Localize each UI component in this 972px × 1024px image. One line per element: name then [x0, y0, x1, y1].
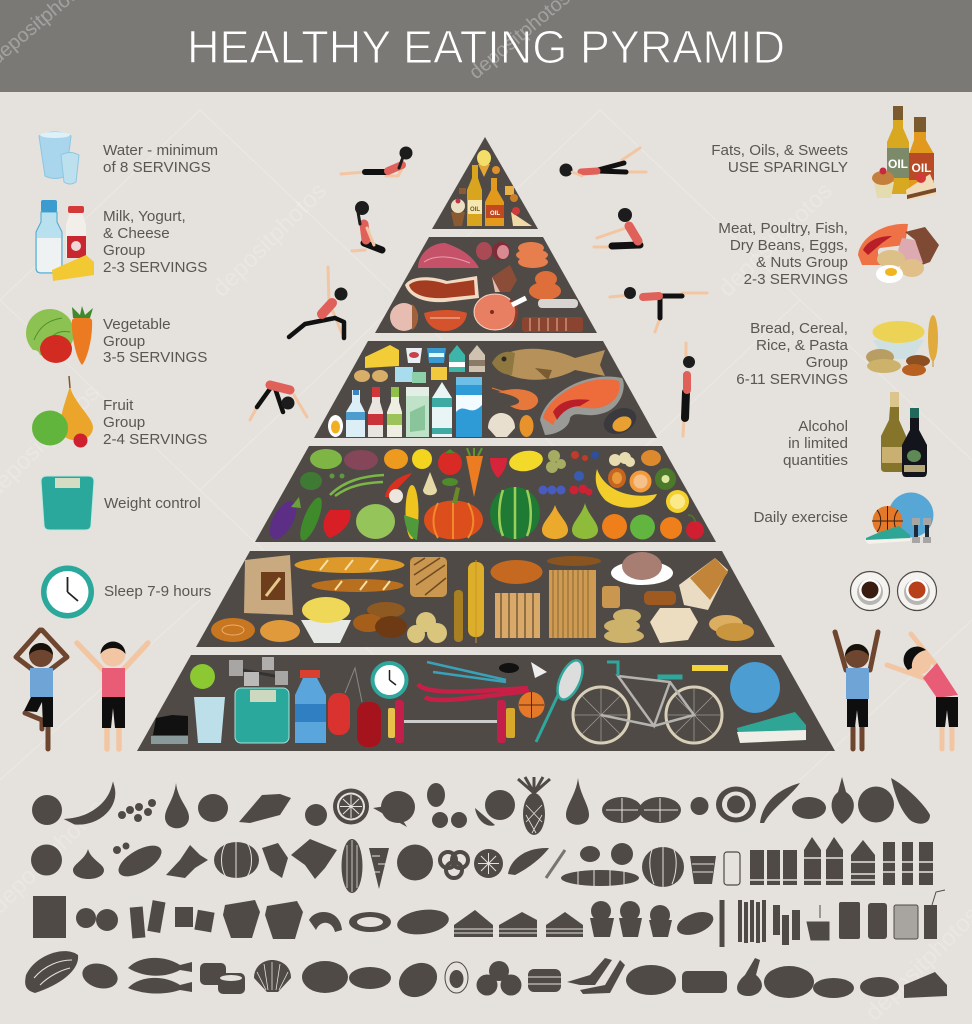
oil bottle yellow: OIL: [470, 207, 480, 213]
banana: [596, 469, 657, 508]
tier 3: dairy and fish: [328, 345, 640, 439]
sausage slices: [476, 242, 510, 260]
icon: bread and cereal: [866, 315, 938, 376]
tier 4: vegetables and fruit: [264, 448, 704, 543]
row 4: seafood and meat silhouettes: [25, 951, 947, 1004]
label: fruit: Fruit: [103, 397, 134, 414]
blueberries: [538, 486, 566, 494]
eggs: [354, 370, 388, 382]
label: alcohol: in limited: [788, 435, 848, 452]
nuts: [609, 452, 635, 467]
icon: vegetables: [26, 306, 93, 365]
baguettes: [294, 557, 404, 592]
blue milk carton: [456, 377, 482, 437]
small sweets: [459, 166, 518, 202]
left legend: [26, 132, 218, 618]
tier 2: meat: [390, 242, 583, 332]
pink ham: [390, 303, 418, 331]
cabbage: [356, 504, 395, 539]
strawberry: [490, 458, 507, 478]
woman side bend: [887, 634, 958, 749]
basketball: [518, 692, 544, 718]
herbs: [300, 472, 322, 490]
label: fruit: 2-4 SERVINGS: [103, 431, 207, 448]
water bottle: [295, 670, 326, 743]
title banner: [0, 0, 972, 92]
red bottle: [368, 387, 383, 437]
cobra pose: [341, 146, 412, 176]
red pepper: [324, 510, 351, 538]
yogurt pots: [406, 348, 446, 363]
exercise ball: [730, 662, 780, 713]
pumpkin: [424, 487, 483, 540]
tomato: [438, 449, 462, 475]
seated forward bend: [594, 208, 640, 247]
label: water: of 8 SERVINGS: [103, 159, 211, 176]
woman tree pose: [16, 630, 67, 749]
teal carton: [432, 382, 452, 437]
row 3: grain and sweets silhouettes: [33, 890, 945, 947]
small fusilli: [602, 586, 620, 608]
label: alcohol: quantities: [783, 452, 848, 469]
shrimp: [492, 388, 538, 410]
row 1: fruit and vegetable silhouettes: [32, 777, 930, 835]
icon: meat and eggs: [858, 224, 939, 283]
boxing gloves: [328, 668, 381, 747]
text: depositphotos: [713, 177, 838, 302]
small loaf: [547, 556, 601, 566]
peppers: [384, 449, 432, 469]
label: meat: Dry Beans, Eggs,: [730, 237, 848, 254]
icon: water glasses: [39, 132, 79, 184]
pyramid tiers: [137, 137, 835, 751]
warrior three pose: [610, 287, 707, 332]
tennis ball: [190, 664, 215, 689]
yoga figures: [250, 146, 707, 436]
label: exercise: Daily exercise: [753, 509, 848, 526]
dark breads: [353, 602, 407, 638]
label: vegetable: 3-5 SERVINGS: [103, 349, 207, 366]
white sausage: [538, 299, 578, 308]
oil bottle orange: OIL: [490, 211, 500, 217]
salmon pieces: [516, 242, 548, 268]
boiled egg: [328, 415, 343, 437]
lettuce: [310, 449, 342, 469]
icon: oils and sweets: OIL: [912, 161, 932, 175]
clock: [370, 661, 408, 699]
label: bread: Group: [806, 354, 848, 371]
label: meat: & Nuts Group: [756, 254, 848, 271]
tier 6: exercise: [151, 657, 806, 747]
label: sleep: Sleep 7-9 hours: [104, 583, 212, 600]
ice cream: [477, 150, 491, 177]
cucumber: [296, 495, 326, 543]
icon: oils and sweets: OIL: [888, 157, 908, 171]
kiwi: [655, 468, 676, 490]
garlic: [389, 489, 403, 503]
bread slice: [260, 620, 300, 642]
crackers: [709, 615, 754, 641]
pears: [542, 503, 598, 539]
purple leaves: [344, 450, 378, 470]
orange slice: [630, 470, 652, 492]
watermelon: [490, 487, 540, 539]
flour bag: [244, 555, 293, 615]
green carton: [406, 387, 429, 437]
icon: milk and cheese: [36, 200, 94, 281]
corn: [404, 485, 419, 540]
brown ham: [492, 265, 517, 292]
lemon: [508, 448, 544, 474]
racket: [536, 657, 588, 742]
woman dark skin arms up: [835, 632, 878, 749]
standing pose: [683, 343, 695, 436]
raw meat: [418, 243, 479, 268]
onion and leaf: [423, 472, 458, 495]
eggplant: [264, 497, 302, 543]
label: alcohol: Alcohol: [798, 418, 848, 435]
round steak: [424, 310, 467, 331]
mussel: [600, 403, 640, 439]
fusilli: [410, 557, 447, 597]
scale: [235, 688, 289, 743]
loaf: [679, 558, 728, 610]
bicycle: [573, 662, 722, 743]
label: water: Water - minimum: [103, 142, 218, 159]
ruler: [692, 665, 728, 671]
big exercising women: [16, 630, 958, 749]
potatoes: [407, 612, 447, 643]
ice and butter: [395, 367, 447, 383]
cherry: [686, 515, 704, 539]
label: meat: Meat, Poultry, Fish,: [718, 220, 848, 237]
apricot: [641, 450, 661, 466]
blue bottle: [346, 390, 365, 437]
label: fruit: Group: [103, 414, 145, 431]
icon: scale: [41, 476, 94, 530]
green bottle: [387, 387, 402, 437]
label: fats: Fats, Oils, & Sweets: [711, 142, 848, 159]
dumbbells: [229, 657, 288, 686]
icon: exercise gear: [865, 492, 934, 544]
carrot: [466, 448, 483, 497]
red currants: [570, 484, 592, 496]
icon: clock: [41, 566, 94, 618]
label: milk: Group: [103, 242, 145, 259]
label: vegetable: Group: [103, 333, 145, 350]
tier 5: grains: [211, 552, 754, 643]
label: vegetable: Vegetable: [103, 316, 171, 333]
cake slice: [511, 207, 532, 226]
bread slices: [650, 608, 698, 643]
icon: oils and sweets: [872, 106, 936, 200]
lunge pose: [289, 267, 348, 338]
gooseberries: [546, 450, 566, 473]
lemon slice: [666, 490, 689, 513]
orange meat: [529, 271, 561, 300]
spaghetti: [549, 570, 596, 638]
bread loaf: [490, 560, 542, 584]
barbell: [388, 700, 515, 743]
label: meat: 2-3 SERVINGS: [744, 271, 848, 288]
mashed bowl: [301, 597, 351, 643]
scallop: [488, 413, 515, 437]
oranges and apple: [602, 514, 682, 540]
row 2: vegetable and dairy silhouettes: [31, 837, 933, 893]
label: bread: Bread, Cereal,: [750, 320, 848, 337]
cupcake: [451, 198, 465, 226]
dark bread piece: [644, 591, 676, 605]
label: weight: Weight control: [104, 495, 201, 512]
fish: [492, 349, 605, 380]
label: bread: Rice, & Pasta: [756, 337, 849, 354]
label: milk: 2-3 SERVINGS: [103, 259, 207, 276]
label: milk: & Cheese: [103, 225, 170, 242]
big steak: [405, 276, 479, 302]
right legend: [711, 106, 939, 610]
small orange seafood: [520, 415, 534, 437]
plate with meat: [611, 552, 673, 585]
icon: coffee cups: [850, 572, 936, 610]
woman arms raised: [77, 642, 148, 749]
small cartons: [449, 345, 485, 372]
silhouette icon rows: [25, 777, 947, 1004]
text: depositphotos: [207, 177, 332, 302]
label: milk: Milk, Yogurt,: [103, 208, 186, 225]
icon: fruit: [32, 376, 93, 448]
label: fats: USE SPARINGLY: [728, 159, 848, 176]
sneaker: [737, 712, 806, 743]
icon: bottles: [881, 392, 927, 477]
ice skate: [151, 715, 188, 744]
cinnamon roll: [211, 618, 255, 642]
salmon steak: [540, 376, 624, 435]
stacked discs: [604, 609, 644, 643]
apricot half: [608, 468, 626, 488]
hockey puck: [499, 663, 519, 673]
tier 1: fats oils sweets: [451, 150, 532, 226]
locust pose: [560, 148, 646, 176]
heading: HEALTHY EATING PYRAMID: [187, 21, 785, 73]
downward dog pose: [250, 385, 307, 420]
shuttlecock: [531, 662, 547, 678]
blue sticks: [427, 662, 506, 682]
cheese: [365, 345, 399, 368]
ham with bone: [474, 294, 526, 330]
glass of water: [194, 697, 225, 743]
peas and green onion: [330, 474, 384, 496]
kneeling pose: [352, 201, 382, 251]
wheat: [454, 560, 484, 643]
pasta: [495, 593, 540, 638]
small berries: [571, 451, 599, 481]
label: bread: 6-11 SERVINGS: [736, 371, 848, 388]
pink sticks: [418, 684, 529, 700]
ribs: [522, 317, 583, 332]
chili: [385, 473, 412, 497]
